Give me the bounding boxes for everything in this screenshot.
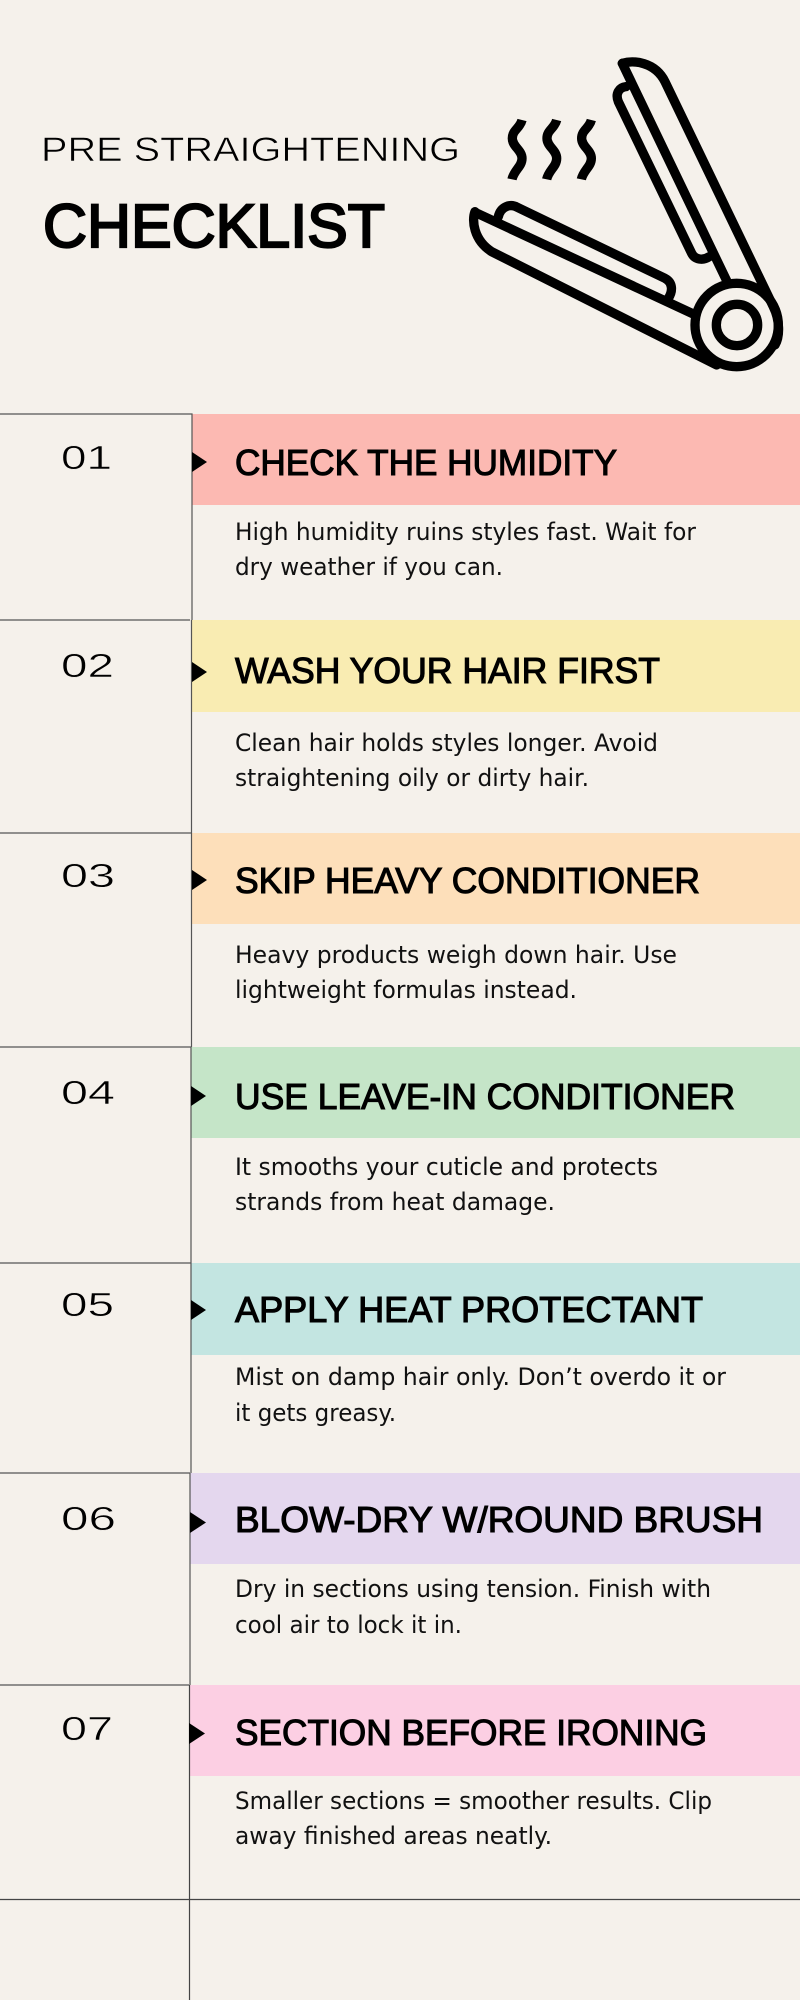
number: 07 xyxy=(61,1710,113,1747)
number: 03 xyxy=(61,857,115,894)
title line: pre straightening: PRE STRAIGHTENING xyxy=(41,131,460,169)
hinge outer xyxy=(695,283,778,367)
description: It smooths your cuticle and protects xyxy=(235,1153,658,1181)
arrow xyxy=(189,1723,205,1744)
row 06: cool air to lock it in. xyxy=(235,1611,462,1639)
band xyxy=(191,1263,800,1355)
icon: hair straightener with steam xyxy=(474,62,779,367)
grid lines xyxy=(0,620,192,833)
row 05 xyxy=(0,1263,800,1473)
description: Smaller sections = smoother results. Clip xyxy=(235,1787,712,1815)
arrow xyxy=(192,452,207,472)
row 07 xyxy=(0,1685,800,2000)
number: 06 xyxy=(61,1500,116,1537)
header title xyxy=(41,131,460,260)
heading: SKIP HEAVY CONDITIONER xyxy=(235,860,700,901)
arrow xyxy=(192,870,207,890)
description: Dry in sections using tension. Finish with xyxy=(235,1575,711,1603)
band xyxy=(192,620,800,712)
arrow xyxy=(191,1086,206,1106)
steam waves xyxy=(512,120,591,179)
description: Clean hair holds styles longer. Avoid xyxy=(235,729,658,757)
grid lines xyxy=(0,414,192,620)
row 04: strands from heat damage. xyxy=(235,1188,555,1216)
heading: USE LEAVE-IN CONDITIONER xyxy=(235,1076,735,1117)
heading: BLOW-DRY W/ROUND BRUSH xyxy=(235,1499,763,1540)
band xyxy=(190,1685,800,1776)
band xyxy=(190,1473,800,1564)
description: Mist on damp hair only. Don’t overdo it or xyxy=(235,1363,726,1391)
row 07: away finished areas neatly. xyxy=(235,1822,552,1850)
arrow xyxy=(191,1300,206,1320)
upper plate xyxy=(617,87,709,259)
row 04 xyxy=(0,1047,800,1263)
description: High humidity ruins styles fast. Wait for xyxy=(235,518,696,546)
band xyxy=(192,833,800,924)
band xyxy=(192,414,800,505)
upper arm xyxy=(622,62,779,345)
number: 01 xyxy=(61,439,112,476)
band xyxy=(191,1047,800,1138)
heading: CHECK THE HUMIDITY xyxy=(235,442,617,483)
heading: WASH YOUR HAIR FIRST xyxy=(235,650,660,691)
title line: checklist: CHECKLIST xyxy=(43,192,385,260)
grid lines xyxy=(0,1473,190,1685)
grid lines xyxy=(0,1263,191,1473)
row 01: dry weather if you can. xyxy=(235,553,503,581)
row 02 xyxy=(0,620,800,833)
number: 02 xyxy=(61,647,114,684)
grid lines xyxy=(0,1047,191,1263)
row 03: lightweight formulas instead. xyxy=(235,976,577,1004)
row 03 xyxy=(0,833,800,1047)
row 01 xyxy=(0,414,800,620)
lower arm xyxy=(474,212,717,365)
arrow xyxy=(190,1512,206,1533)
description: Heavy products weigh down hair. Use xyxy=(235,941,677,969)
row 05: it gets greasy. xyxy=(235,1399,396,1427)
grid lines xyxy=(0,1685,800,2000)
heading: SECTION BEFORE IRONING xyxy=(235,1712,707,1753)
row 06 xyxy=(0,1473,800,1685)
number: 05 xyxy=(61,1286,114,1323)
heading: APPLY HEAT PROTECTANT xyxy=(235,1289,703,1330)
grid lines xyxy=(0,833,192,1047)
row 02: straightening oily or dirty hair. xyxy=(235,764,589,792)
lower plate xyxy=(498,206,671,298)
hinge inner xyxy=(716,304,758,346)
number: 04 xyxy=(61,1074,115,1111)
arrow xyxy=(192,662,207,682)
